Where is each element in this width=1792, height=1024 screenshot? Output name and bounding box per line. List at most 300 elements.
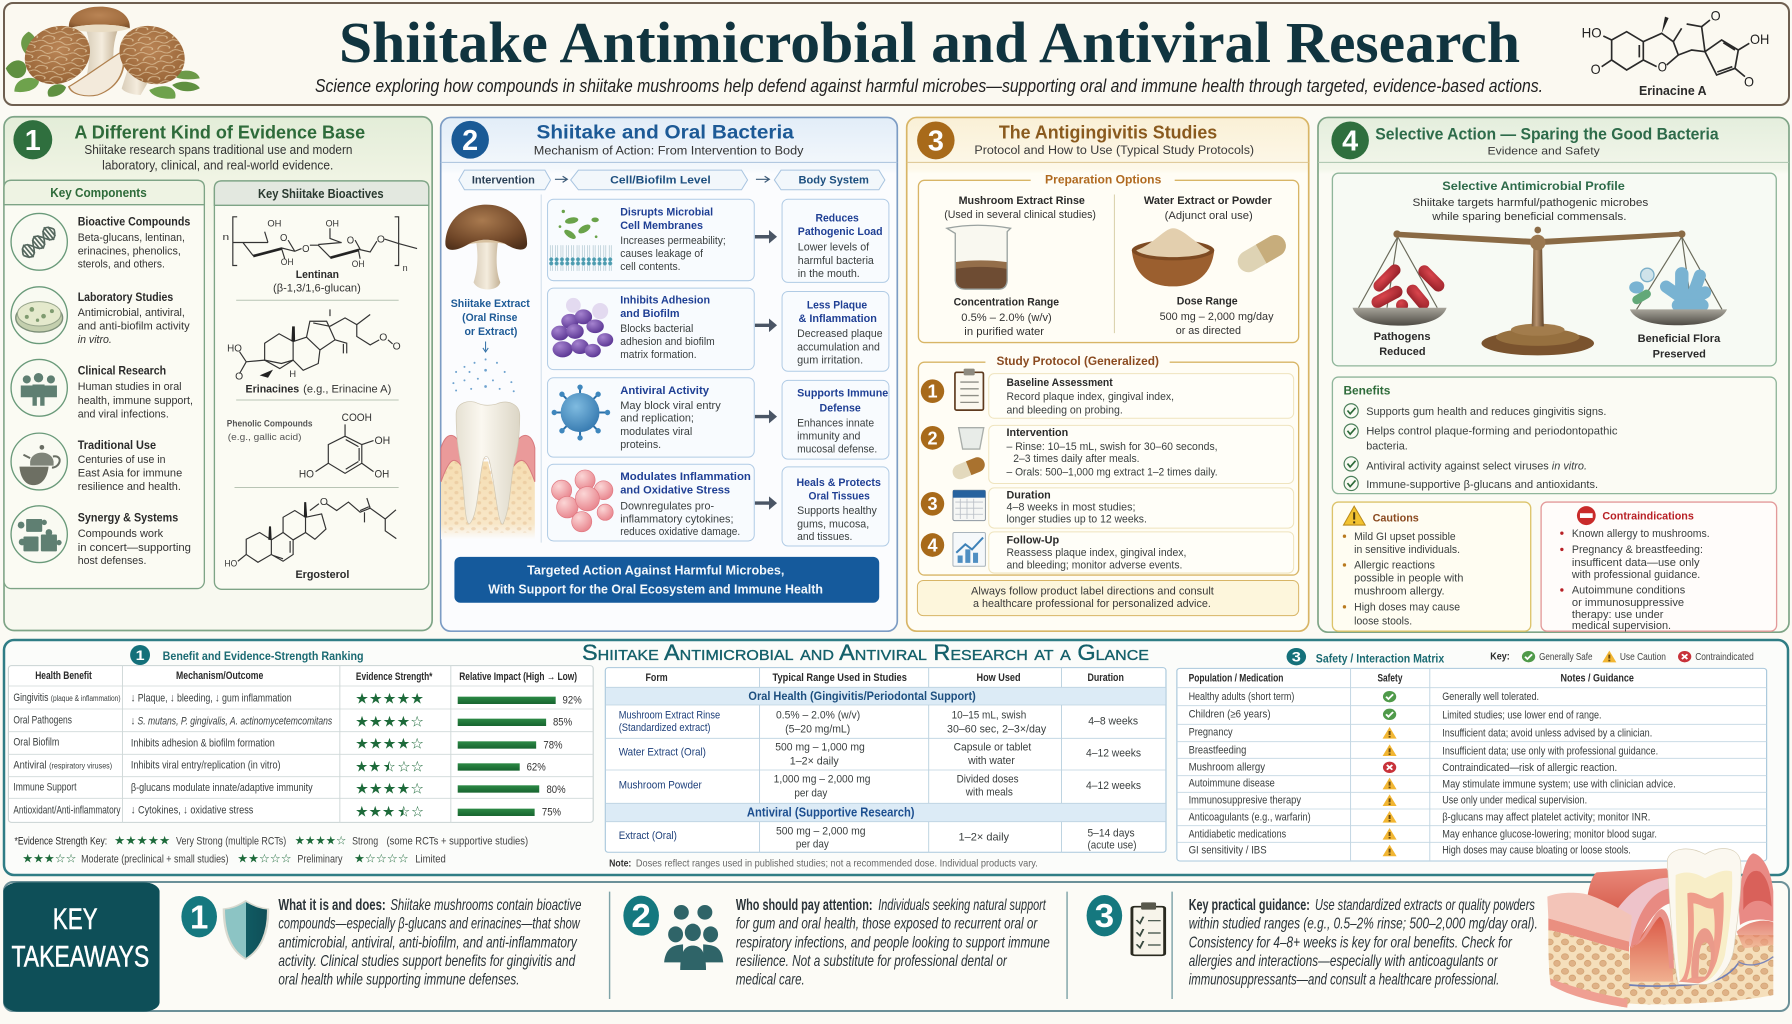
panel: benefits: Helps control plaque-forming and periodontopathic bbox=[1366, 425, 1618, 437]
icon: checklist clipboard bbox=[1132, 902, 1165, 955]
panel: contraindications: Autoimmune conditions bbox=[1572, 585, 1685, 597]
table 3 populations: Children (≥6 years) bbox=[1189, 708, 1271, 720]
mechanism card: antiviral bbox=[548, 378, 754, 457]
table 3 column headers: Notes / Guidance bbox=[1561, 672, 1634, 684]
table 1 mechanisms: Inhibits adhesion & biofilm formation bbox=[131, 736, 275, 749]
option: water extract or powder: Water Extract or Powder bbox=[1144, 195, 1272, 207]
takeaway 3 text: Key practical guidance: bbox=[1189, 896, 1310, 914]
step 2: intervention: 2–3 times daily after meals. bbox=[1013, 453, 1140, 465]
item: Traditional Use bbox=[78, 438, 182, 493]
label: beneficial flora preserved: Preserved bbox=[1653, 348, 1706, 360]
molecule: Lentinan: OH bbox=[267, 219, 281, 229]
table 2 duration: (acute use) bbox=[1088, 838, 1136, 851]
item: Synergy & Systems: in concert—supporting bbox=[78, 542, 191, 554]
arrows to body system bbox=[755, 230, 777, 510]
panel: cautions bbox=[1332, 502, 1531, 631]
outcome card: plaque: accumulation and bbox=[797, 341, 880, 353]
table 2 duration: 4–8 weeks bbox=[1088, 714, 1138, 727]
label: shiitake extract: Shiitake Extract bbox=[451, 298, 530, 310]
molecule: Phenolic compounds: (e.g., gallic acid) bbox=[228, 432, 302, 442]
icon: teapot and bowl bbox=[11, 433, 67, 490]
panel: preparation options bbox=[918, 172, 1299, 343]
panel: cautions: Mild GI upset possible bbox=[1354, 531, 1456, 543]
outcome card: plaque: gum irritation. bbox=[797, 354, 863, 367]
mechanism card: inflammation: Modulates Inflammation bbox=[620, 471, 751, 483]
intro text: laboratory, clinical, and real-world evidence. bbox=[102, 157, 333, 173]
molecule: Erinacine A: Erinacine A bbox=[1639, 84, 1707, 98]
item: Bioactive Compounds: Bioactive Compounds bbox=[78, 215, 191, 229]
subtitle: Science exploring how compounds in shiitake mushrooms help defend against harmful microbes—supporting oral and immune health through targeted, evidence-based actions. bbox=[315, 76, 1543, 96]
takeaway 3 text bbox=[1189, 896, 1538, 988]
mechanism card: membranes bbox=[548, 199, 754, 281]
step 3: duration: 4–8 weeks in most studies; bbox=[1007, 501, 1136, 514]
table 3 notes: May stimulate immune system; use with clinician advice. bbox=[1442, 778, 1676, 790]
mechanism card: inflammation: inflammatory cytokines; bbox=[620, 513, 733, 525]
molecule: Lentinan: O bbox=[302, 244, 310, 255]
key takeaways label: KEY bbox=[53, 903, 98, 935]
item: Clinical Research: and viral infections. bbox=[78, 409, 169, 421]
band: oral health: Oral Health (Gingivitis/Periodontal Support) bbox=[748, 689, 976, 703]
panel: key shiitake bioactives: Key Shiitake Bioactives bbox=[258, 186, 384, 201]
table 1 mechanisms: β-glucans modulate innate/adaptive immunity bbox=[131, 781, 313, 794]
table 2 forms: Mushroom Extract Rinse bbox=[619, 708, 720, 721]
badge 3: 3 bbox=[928, 125, 944, 158]
mechanism card: membranes: Increases permeability; bbox=[620, 235, 726, 247]
table 1 column headers: Relative Impact (High → Low) bbox=[459, 672, 577, 683]
table 2 usage: Divided doses bbox=[957, 772, 1019, 785]
item: Synergy & Systems: Compounds work bbox=[78, 528, 163, 540]
item: Clinical Research: Clinical Research bbox=[78, 364, 166, 378]
takeaway 2 text bbox=[736, 896, 1050, 988]
molecule: Erinacines: O bbox=[379, 332, 387, 344]
item: Clinical Research: Human studies in oral bbox=[78, 381, 182, 393]
badge: table 3 bbox=[1287, 648, 1306, 665]
safety key: Key: bbox=[1490, 651, 1510, 662]
molecule: Erinacines: O bbox=[393, 341, 401, 352]
table 2 usage: with meals bbox=[965, 785, 1013, 798]
badge: table 1 bbox=[130, 645, 150, 665]
badge 1 bbox=[13, 120, 52, 159]
option: water extract or powder: (Adjunct oral use) bbox=[1165, 210, 1253, 222]
key takeaways label bbox=[3, 882, 160, 1012]
evidence stars: ★★★ bbox=[355, 804, 395, 820]
step 1: baseline assessment: Baseline Assessment bbox=[1007, 377, 1113, 389]
key takeaways panel: antimicrobial, antiviral, anti-biofilm, and anti-inflammatory bbox=[278, 933, 578, 951]
outcome card: pathogenic load: Pathogenic Load bbox=[798, 226, 883, 238]
table 2 ranges: per day bbox=[794, 786, 828, 799]
table 2 note: Note: bbox=[609, 858, 631, 869]
note box: a healthcare professional for personalized advice. bbox=[973, 598, 1211, 610]
table 1 mechanisms: ↓ S. mutans, P. gingivalis, A. actinomycetemcomitans bbox=[131, 714, 332, 727]
table 2 duration: 5–14 days bbox=[1088, 826, 1135, 839]
table 2 ranges: 500 mg – 1,000 mg bbox=[775, 740, 865, 753]
mechanism card: antiviral: Antiviral Activity bbox=[620, 385, 710, 397]
safety key bbox=[1490, 651, 1754, 663]
pathogens bbox=[1369, 262, 1447, 312]
panel: benefits: bacteria. bbox=[1366, 441, 1408, 453]
arrow and spray droplets bbox=[452, 342, 515, 392]
option: water extract or powder: or as directed bbox=[1176, 325, 1241, 337]
mechanism card: inflammation: reduces oxidative damage. bbox=[620, 526, 740, 538]
relative impact values: 80% bbox=[546, 783, 566, 796]
intro text: Shiitake research spans traditional use and modern bbox=[84, 142, 352, 157]
panel: study protocol: Study Protocol (Generalized) bbox=[996, 354, 1159, 368]
evidence strength key: Very Strong (multiple RCTs) bbox=[176, 836, 286, 847]
panel: key components: Key Components bbox=[50, 185, 147, 200]
table 1 benefit names bbox=[13, 691, 121, 816]
step 3: duration: Duration bbox=[1007, 490, 1051, 502]
table 1 benefit names: Oral Pathogens bbox=[13, 713, 72, 726]
panel: benefits: Supports gum health and reduces gingivitis signs. bbox=[1366, 406, 1606, 418]
heading: A Different Kind of Evidence Base bbox=[74, 123, 365, 143]
molecule: Erinacine A: O bbox=[1658, 58, 1667, 74]
molecule: Phenolic compounds: OH bbox=[375, 435, 390, 447]
step 4: follow-up bbox=[921, 532, 1294, 573]
panel: contraindications: therapy: use under bbox=[1572, 609, 1664, 621]
option: mushroom extract rinse: (Used in several clinical studies) bbox=[944, 209, 1096, 221]
relative impact values: 75% bbox=[542, 805, 561, 818]
step 4: follow-up: Follow-Up bbox=[1007, 534, 1059, 546]
panel: contraindications: Known allergy to mushrooms. bbox=[1572, 528, 1710, 540]
takeaway 1 text: oral health while supporting immune defenses. bbox=[278, 970, 519, 988]
table 1 mechanisms bbox=[131, 691, 332, 816]
mechanism card: membranes: Cell Membranes bbox=[620, 220, 703, 232]
mechanism card: biofilm bbox=[548, 288, 754, 370]
outcome card: plaque: & Inflammation bbox=[798, 313, 877, 325]
outcome card: immune defense: Defense bbox=[820, 402, 861, 415]
note box bbox=[917, 580, 1299, 616]
mechanism card: antiviral: May block viral entry bbox=[620, 400, 721, 412]
label: beneficial flora preserved bbox=[1638, 333, 1721, 360]
badge: takeaway 3 bbox=[1087, 895, 1122, 936]
panel: benefits: Benefits bbox=[1343, 384, 1391, 398]
item: Synergy & Systems: host defenses. bbox=[78, 555, 146, 567]
badge 2: 2 bbox=[462, 125, 478, 157]
item: Synergy & Systems bbox=[78, 511, 191, 567]
icon: people group bbox=[664, 905, 723, 970]
icon: tooth in gum bbox=[441, 402, 535, 539]
outcome card: oral tissues bbox=[782, 467, 889, 546]
outcome card: pathogenic load: Lower levels of bbox=[798, 241, 870, 253]
heading: The Antigingivitis Studies bbox=[999, 123, 1217, 143]
step 1: baseline assessment: Record plaque index, gingival index, bbox=[1007, 391, 1174, 403]
table 2 usage: Capsule or tablet bbox=[954, 740, 1032, 753]
label: shiitake extract: or Extract) bbox=[464, 326, 518, 338]
icon: inflamed cells bbox=[552, 470, 613, 532]
step 4: follow-up: Reassess plaque index, gingival index, bbox=[1007, 547, 1186, 559]
table 3 column headers bbox=[1189, 672, 1634, 684]
table 3 safety icons bbox=[1383, 691, 1397, 856]
table 1 benefit names: Oral Biofilm bbox=[13, 735, 59, 748]
icon: capsule bbox=[1234, 231, 1290, 276]
evidence stars: ★★ bbox=[355, 759, 381, 775]
table 2 note: Doses reflect ranges used in published studies; not a recommended dose. Individual products vary. bbox=[636, 858, 1038, 869]
panel: cautions: Allergic reactions bbox=[1354, 560, 1435, 572]
badge: table 3: 3 bbox=[1292, 650, 1301, 665]
panel: cautions: loose stools. bbox=[1354, 615, 1412, 627]
icon: biofilm cluster bbox=[551, 298, 613, 357]
step 2: intervention: – Orals: 500–1,000 mg extract 1–2 times daily. bbox=[1007, 467, 1218, 479]
relative impact bars bbox=[458, 697, 556, 816]
molecule: Lentinan: O bbox=[280, 233, 288, 244]
relative impact values: 92% bbox=[563, 693, 582, 706]
table 3 populations: Antidiabetic medications bbox=[1189, 828, 1286, 840]
molecule: Lentinan: n bbox=[403, 263, 408, 273]
evidence stars: ★ bbox=[397, 804, 410, 820]
molecule: Lentinan: (β-1,3/1,6-glucan) bbox=[273, 282, 361, 295]
item: Laboratory Studies: and anti-biofilm activity bbox=[78, 321, 190, 333]
table 2 column headers: How Used bbox=[977, 673, 1021, 684]
evidence strength key: Strong bbox=[352, 836, 378, 847]
evidence strength key bbox=[15, 833, 528, 865]
panel: cautions: possible in people with bbox=[1354, 572, 1463, 585]
table 2 usage: 30–60 sec, 2–3×/day bbox=[947, 722, 1047, 735]
table 2 column headers: Form bbox=[645, 673, 668, 684]
evidence strength key: ★☆☆☆☆ bbox=[354, 851, 409, 865]
outcome card: immune defense: Supports Immune bbox=[797, 388, 888, 400]
at-a-glance title: Shiitake Antimicrobial and Antiviral Research at a Glance bbox=[582, 640, 1149, 665]
relative impact values: 85% bbox=[553, 715, 572, 728]
evidence strength key: (some RCTs + supportive studies) bbox=[387, 836, 528, 847]
mechanism card: biofilm: Inhibits Adhesion bbox=[620, 294, 710, 306]
icon: prohibited sign bbox=[1577, 506, 1596, 525]
at-a-glance panel bbox=[4, 640, 1788, 875]
table 1 benefit names: Antioxidant/Anti-inflammatory bbox=[13, 803, 121, 816]
banner bbox=[454, 557, 879, 603]
note box: Always follow product label directions and consult bbox=[971, 585, 1214, 597]
heading: Shiitake and Oral Bacteria bbox=[537, 122, 794, 144]
safety key: Contraindicated bbox=[1695, 652, 1754, 663]
panel: selective antimicrobial profile: Shiitake targets harmful/pathogenic microbes bbox=[1412, 197, 1649, 209]
molecule: Lentinan bbox=[222, 217, 417, 295]
evidence strength key: Preliminary bbox=[297, 854, 343, 865]
panel: contraindications: Pregnancy & breastfeeding: bbox=[1572, 544, 1703, 556]
mechanism card: membranes: cell contents. bbox=[620, 261, 681, 273]
outcome card: oral tissues: Oral Tissues bbox=[809, 490, 870, 502]
mechanism card: antiviral: and replication; bbox=[620, 413, 694, 425]
evidence stars: ☆ bbox=[411, 804, 424, 820]
table 2 column headers bbox=[645, 673, 1124, 684]
label: pathogens reduced: Pathogens bbox=[1374, 331, 1431, 343]
relative impact values: 62% bbox=[527, 760, 546, 773]
table 2 ranges bbox=[774, 708, 871, 850]
table 2 duration: 4–12 weeks bbox=[1086, 746, 1141, 759]
intro text bbox=[84, 142, 352, 173]
table 3 populations: Breastfeeding bbox=[1189, 744, 1246, 756]
table 3 notes: Use only under medical supervision. bbox=[1442, 794, 1587, 806]
option: water extract or powder bbox=[1132, 195, 1290, 337]
key takeaways panel bbox=[3, 849, 1789, 1012]
table 3 populations: Pregnancy bbox=[1189, 726, 1233, 738]
molecule: Phenolic compounds: OH bbox=[375, 468, 389, 480]
label: pathogens reduced bbox=[1374, 331, 1431, 358]
table 3 notes: Insufficient data; use only with professional guidance. bbox=[1442, 745, 1658, 757]
key takeaways panel: for gum and oral health, those exposed to recurrent oral or bbox=[736, 914, 1038, 932]
icon: warning triangle bbox=[1343, 506, 1365, 525]
outcome card: immune defense: Enhances innate bbox=[797, 417, 874, 429]
panel: contraindications: insufficent data—use only bbox=[1572, 557, 1700, 569]
panel: benefits: Immune-supportive β-glucans and antioxidants. bbox=[1366, 479, 1598, 491]
molecule: Lentinan: O bbox=[377, 234, 385, 246]
step 2: intervention: Intervention bbox=[1007, 427, 1068, 439]
icon: balance scale bbox=[1352, 227, 1727, 355]
molecule: Lentinan: O bbox=[347, 235, 354, 247]
takeaway 2 text: medical care. bbox=[736, 970, 805, 988]
outcome card: pathogenic load: in the mouth. bbox=[798, 268, 860, 280]
takeaway 1 text bbox=[278, 896, 581, 988]
outcome card: pathogenic load bbox=[782, 199, 889, 282]
table 1 column headers: Evidence Strength* bbox=[356, 672, 433, 683]
badge: table 1: 1 bbox=[136, 648, 145, 664]
table 3 notes bbox=[1442, 691, 1676, 856]
table 1 benefit names: Gingivitis (plaque & inflammation) bbox=[13, 691, 121, 704]
heading: Selective Action — Sparing the Good Bacteria bbox=[1375, 125, 1719, 144]
takeaway 2 text: Who should pay attention: bbox=[736, 896, 872, 914]
safety key: Use Caution bbox=[1620, 652, 1666, 663]
table 3 populations: Immunosuppresive therapy bbox=[1189, 794, 1301, 806]
panel: contraindications bbox=[1541, 502, 1777, 632]
key takeaways panel: activity. Clinical studies support benefits for gingivitis and bbox=[278, 952, 576, 970]
flow chips: Body System bbox=[798, 175, 869, 187]
header banner bbox=[4, 3, 1789, 105]
table 3 notes: β-glucans may affect platelet activity; monitor INR. bbox=[1442, 811, 1650, 823]
panel: contraindications: Contraindications bbox=[1602, 511, 1694, 523]
step 1: baseline assessment bbox=[921, 369, 1294, 418]
molecule: Erinacine A: O bbox=[1744, 74, 1754, 90]
molecule: Phenolic compounds: HO bbox=[299, 468, 314, 480]
option: water extract or powder: Dose Range bbox=[1177, 295, 1238, 307]
flow chips: Cell/Biofilm Level bbox=[610, 175, 711, 187]
panel 2: Shiitake and Oral Bacteria bbox=[441, 117, 897, 631]
panel: selective antimicrobial profile bbox=[1332, 173, 1776, 366]
key takeaways panel: compounds—especially β-glucans and erinacines—that show bbox=[278, 914, 580, 932]
step 3: duration: longer studies up to 12 weeks. bbox=[1007, 514, 1147, 526]
table 1 benefit names: Antiviral (respiratory viruses) bbox=[13, 758, 112, 771]
item: Bioactive Compounds bbox=[78, 215, 191, 271]
evidence strength key: Moderate (preclinical + small studies) bbox=[81, 854, 229, 865]
table 3 populations: Autoimmune disease bbox=[1189, 777, 1275, 789]
molecule: Lentinan: OH bbox=[281, 257, 293, 267]
mechanism card: membranes: Disrupts Microbial bbox=[620, 206, 713, 218]
panel: selective antimicrobial profile: Selective Antimicrobial Profile bbox=[1442, 179, 1625, 193]
table 3 notes: May enhance glucose-lowering; monitor blood sugar. bbox=[1442, 828, 1657, 840]
table 2 forms: Water Extract (Oral) bbox=[619, 745, 706, 758]
table 2 ranges: (5–20 mg/mL) bbox=[785, 722, 850, 735]
outcome card: oral tissues: Heals & Protects bbox=[796, 477, 881, 489]
item: Traditional Use: resilience and health. bbox=[78, 481, 181, 493]
molecule: Erinacine A: O bbox=[1591, 61, 1601, 77]
table 1 mechanisms: ↓ Plaque, ↓ bleeding, ↓ gum inflammation bbox=[131, 691, 292, 704]
badge: takeaway 1: 1 bbox=[190, 899, 208, 935]
step 2: intervention: – Rinse: 10–15 mL, swish for 30–60 seconds, bbox=[1007, 441, 1218, 453]
molecule: Erinacines: O bbox=[235, 372, 243, 383]
table 1 heading: Benefit and Evidence-Strength Ranking bbox=[163, 649, 364, 663]
item: Laboratory Studies: Laboratory Studies bbox=[78, 290, 173, 304]
band: antiviral: Antiviral (Supportive Research) bbox=[747, 806, 915, 819]
step 2: intervention: 2 bbox=[927, 428, 938, 448]
banner: With Support for the Oral Ecosystem and Immune Health bbox=[488, 581, 823, 596]
mechanism card: antiviral: modulates viral bbox=[620, 426, 692, 438]
panel: preparation options: Preparation Options bbox=[1045, 172, 1162, 186]
outcome card: oral tissues: gums, mucosa, bbox=[797, 518, 869, 530]
table 2 ranges: 500 mg – 2,000 mg bbox=[776, 824, 866, 837]
option: mushroom extract rinse: Concentration Range bbox=[954, 296, 1059, 308]
item: Traditional Use: Centuries of use in bbox=[78, 454, 165, 466]
panel: cautions: High doses may cause bbox=[1354, 602, 1460, 614]
panel: key shiitake bioactives bbox=[214, 181, 429, 589]
panel 3: The Antigingivitis Studies bbox=[907, 117, 1309, 631]
table 3 notes: High doses may cause bloating or loose stools. bbox=[1442, 844, 1631, 856]
step 1: baseline assessment: and bleeding on probing. bbox=[1007, 404, 1123, 417]
molecule: Erinacine A bbox=[1582, 8, 1769, 98]
table 3 notes: Limited studies; use lower end of range. bbox=[1442, 709, 1602, 721]
table 2 column headers: Typical Range Used in Studies bbox=[773, 673, 907, 684]
badge 3 bbox=[917, 121, 955, 159]
table 2 ranges: 1–2× daily bbox=[790, 754, 840, 767]
key takeaways panel: TAKEAWAYS bbox=[11, 940, 149, 973]
evidence stars: ☆ bbox=[383, 759, 396, 775]
table 1 column headers bbox=[35, 671, 577, 683]
outcome card: oral tissues: and tissues. bbox=[797, 531, 852, 543]
table 3 heading: Safety / Interaction Matrix bbox=[1316, 651, 1445, 665]
icon: beaker bbox=[947, 225, 1011, 289]
outcome card: immune defense bbox=[782, 380, 889, 459]
key takeaways panel: Individuals seeking natural support bbox=[878, 896, 1046, 914]
icon: virus bbox=[552, 384, 610, 441]
badge: takeaway 1 bbox=[181, 896, 217, 937]
molecule: Phenolic compounds: Phenolic Compounds bbox=[227, 418, 313, 428]
icon: cell membrane bbox=[548, 210, 613, 271]
step 4: follow-up: 4 bbox=[927, 535, 938, 555]
panel: study protocol bbox=[918, 354, 1299, 575]
outcome card: immune defense: immunity and bbox=[797, 431, 860, 443]
evidence stars: ★★★★☆ bbox=[355, 782, 424, 797]
evidence stars: ☆☆ bbox=[397, 759, 424, 775]
step 3: duration: 3 bbox=[927, 494, 938, 514]
icon: petri dish bbox=[11, 287, 67, 344]
option: mushroom extract rinse: 0.5% – 2.0% (w/v) bbox=[961, 312, 1052, 324]
table 2: typical range used in studies bbox=[605, 668, 1166, 869]
table 3: safety and interaction matrix bbox=[1177, 648, 1767, 861]
step 4: follow-up: and bleeding; monitor adverse events. bbox=[1007, 560, 1182, 572]
icon: mushroom bbox=[445, 205, 527, 289]
outcome card: plaque bbox=[782, 292, 889, 371]
table 2 usage: 1–2× daily bbox=[959, 830, 1010, 843]
outcome card: plaque: Decreased plaque bbox=[797, 328, 883, 340]
badge 1: 1 bbox=[25, 125, 41, 157]
badge 4 bbox=[1331, 121, 1369, 159]
molecule: Lentinan: OH bbox=[326, 219, 339, 229]
option: mushroom extract rinse: in purified water bbox=[964, 326, 1044, 338]
label: beneficial flora preserved: Beneficial Flora bbox=[1638, 333, 1721, 345]
icon: DNA bbox=[11, 213, 67, 270]
panel: contraindications: or immunosuppressive bbox=[1572, 597, 1684, 609]
illustration: tooth cross-section bbox=[1547, 849, 1773, 1008]
item: Laboratory Studies bbox=[78, 290, 190, 346]
table 3 populations: Mushroom allergy bbox=[1189, 761, 1265, 773]
step 1: baseline assessment: 1 bbox=[927, 382, 938, 402]
mechanism card: membranes: causes leakage of bbox=[620, 248, 704, 260]
molecule: Erinacines: (e.g., Erinacine A) bbox=[303, 384, 391, 396]
outcome card: plaque: Less Plaque bbox=[807, 299, 867, 311]
icon: shield bbox=[224, 901, 268, 959]
table 3 populations: GI sensitivity / IBS bbox=[1189, 844, 1267, 856]
table 2 usage: 10–15 mL, swish bbox=[952, 708, 1026, 721]
molecule: Erinacine A: HO bbox=[1582, 25, 1602, 41]
panel: cautions: Cautions bbox=[1373, 513, 1419, 525]
outcome card: pathogenic load: Reduces bbox=[816, 212, 859, 225]
molecule: Erinacine A: O bbox=[1711, 8, 1721, 24]
